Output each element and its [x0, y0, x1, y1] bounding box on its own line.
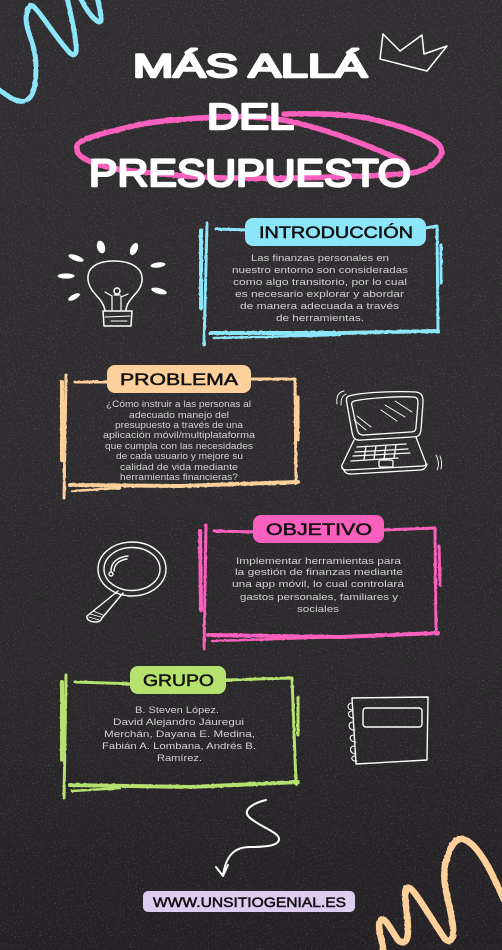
text block: objetivo: gastos personales, familiares y [240, 592, 398, 603]
text block: grupo [102, 705, 256, 764]
title [89, 48, 411, 195]
website pill [143, 891, 355, 912]
text block: grupo: Fabián A. Lombana, Andrés B. [102, 741, 256, 752]
heading pill: problema: PROBLEMA [120, 370, 239, 389]
text block: introducción: es necesario explorar y abordar [235, 289, 404, 300]
title: PRESUPUESTO [89, 153, 411, 195]
heading pill: problema [107, 365, 251, 393]
text block: problema: herramientas financieras? [120, 472, 238, 483]
heading pill: objetivo [253, 515, 384, 543]
heading pill: grupo [130, 666, 226, 694]
text block: grupo: B. Steven López. [135, 705, 219, 716]
icon: light bulb [58, 240, 167, 326]
icon: crown [380, 34, 447, 71]
text block: introducción: nuestro entorno son consideradas [232, 265, 408, 276]
text block: problema: ¿Cómo instruir a las personas al [106, 399, 251, 410]
title: DEL [207, 96, 294, 137]
text block: introducción [232, 253, 408, 324]
text block: problema: calidad de vida mediante [120, 462, 238, 473]
text block: objetivo: la gestión de finanzas mediante [235, 567, 403, 578]
text block: objetivo [232, 556, 405, 615]
heading pill: objetivo: OBJETIVO [266, 520, 372, 539]
panel: objetivo [200, 515, 440, 649]
icon: magnifying glass [87, 542, 166, 622]
title underline: pink ellipse scribble [77, 114, 442, 178]
decorative squiggle: orange bottom-right [379, 839, 502, 950]
frame: introducción [201, 223, 441, 345]
panel: grupo [62, 666, 298, 798]
text block: introducción: como algo transitorio, por lo cual [233, 277, 407, 288]
text block: grupo: Merchán, Dayana E. Medina, [104, 729, 255, 740]
text block: problema: presupuesto a través de una [115, 420, 244, 431]
text block: grupo: Ramírez. [157, 753, 202, 764]
icon: notebook [348, 697, 428, 764]
text block: introducción: Las finanzas personales en [251, 253, 389, 264]
icon: laptop [337, 391, 442, 474]
title: MÁS ALLÁ [133, 48, 368, 84]
heading pill: introducción [245, 218, 426, 246]
website pill: WWW.UNSITIOGENIAL.ES [153, 894, 346, 910]
panel: problema [62, 365, 298, 498]
frame: problema [62, 375, 298, 498]
heading pill: grupo: GRUPO [143, 671, 214, 690]
decorative squiggle: blue top-left [0, 0, 101, 101]
frame: objetivo [200, 525, 440, 649]
text block: problema: de cada usuario y mejore su [116, 451, 243, 462]
text block: problema: adecuado manejo del [129, 410, 229, 421]
text block: problema [103, 399, 256, 483]
text block: grupo: David Alejandro Jáuregui [113, 717, 244, 728]
text block: objetivo: una app móvil, lo cual controlará [232, 579, 405, 590]
text block: objetivo: sociales [297, 604, 339, 615]
text block: objetivo: Implementar herramientas para [236, 556, 402, 567]
frame: grupo [62, 675, 298, 798]
text block: introducción: de herramientas. [276, 313, 364, 324]
text block: problema: que cumpla con las necesidades [105, 441, 253, 452]
text block: problema: aplicación móvil/multiplataforma [103, 430, 256, 441]
arrow: curved pointer to website [216, 800, 279, 876]
panel: introducción [201, 218, 441, 345]
heading pill: introducción: INTRODUCCIÓN [259, 223, 413, 242]
text block: introducción: de manera adecuada a través [240, 301, 399, 312]
